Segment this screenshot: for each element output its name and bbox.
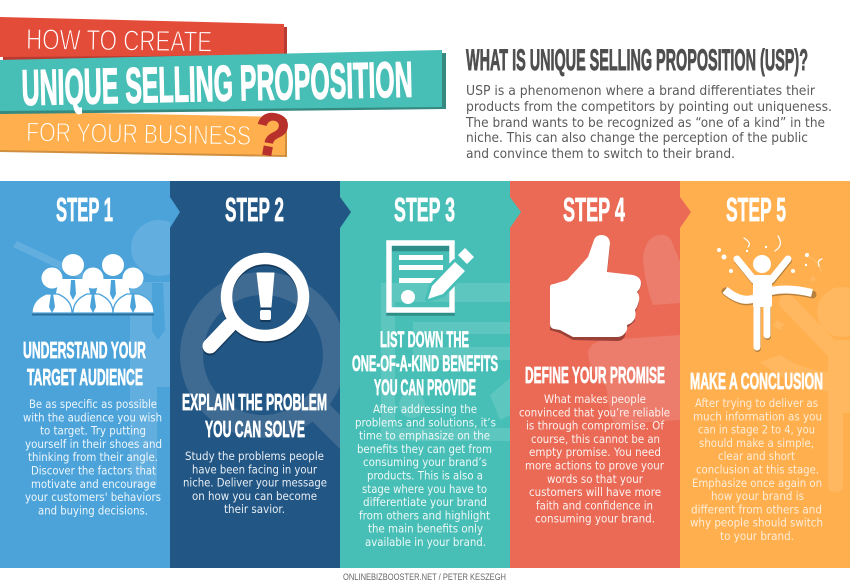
step 4 text: more actions to prove your xyxy=(525,458,664,472)
usp intro xyxy=(465,44,832,162)
step 1 text: yourself in their shoes and xyxy=(25,437,162,451)
step 5 text: much information as you xyxy=(693,409,822,423)
step 5 text xyxy=(690,396,823,543)
step 4 text: course, this cannot be an xyxy=(531,432,660,446)
step 3 text: differentiate your brand xyxy=(363,495,487,509)
icon: runner at finish line xyxy=(717,236,822,348)
step 3 text: from others and highlight xyxy=(359,508,490,522)
step 3 text: After addressing the xyxy=(373,402,477,416)
step 3 subheading: YOU CAN PROVIDE xyxy=(374,375,476,400)
step 2 text: Study the problems people xyxy=(185,449,324,463)
step 5 text: clear and short xyxy=(718,449,795,463)
step 3 subheading: LIST DOWN THE xyxy=(380,327,469,352)
step 1 subheading xyxy=(23,337,146,390)
arrow: step 1 to step 2 xyxy=(170,197,180,228)
step 1 text: motivate and encourage xyxy=(31,477,156,491)
step 3 text: stage where you have to xyxy=(362,482,487,496)
red banner: HOW TO CREATE xyxy=(26,24,212,59)
step 1 text: your customers' behaviors xyxy=(25,490,161,504)
arrow: step 4 to step 5 xyxy=(680,197,691,228)
step 2 subheading xyxy=(182,389,327,442)
orange banner xyxy=(0,111,287,157)
step 1 text xyxy=(23,397,162,517)
step 4 subheading: DEFINE YOUR PROMISE xyxy=(525,362,665,388)
step 2 subheading: YOU CAN SOLVE xyxy=(205,416,305,442)
step 3 text: consuming your brand’s xyxy=(363,455,487,469)
orange banner: FOR YOUR BUSINESS xyxy=(26,117,251,151)
usp paragraph: products from the competitors by pointing out uniqueness. xyxy=(466,100,832,115)
step 5 text: to your brand. xyxy=(720,529,794,543)
step 5 text: why people should switch xyxy=(690,516,823,530)
step 5 text: should make a simple, xyxy=(699,436,814,450)
step 5 text: conclusion at this stage. xyxy=(696,462,819,476)
usp paragraph xyxy=(465,84,832,162)
heading: step 5: STEP 5 xyxy=(726,191,786,228)
red banner xyxy=(0,17,287,60)
icon: checklist with pencil xyxy=(389,243,474,313)
step 4 text: convinced that you’re reliable xyxy=(519,405,670,419)
step 2 text: have been facing in your xyxy=(192,462,317,476)
step 5 text: After trying to deliver as xyxy=(695,396,818,410)
step 3 text: available in your brand. xyxy=(365,535,486,549)
step 2 subheading: EXPLAIN THE PROBLEM xyxy=(182,389,327,415)
step 2 text: on how you can become xyxy=(192,489,317,503)
step 2 text: their savior. xyxy=(224,502,285,516)
background figure: document xyxy=(381,283,510,441)
step 5 text: how your brand is xyxy=(711,489,804,503)
step 4 text: is through compromise. Of xyxy=(526,419,665,433)
step 5 text: can in stage 2 to 4, you xyxy=(698,423,815,437)
step 3 text: the main benefits only xyxy=(368,522,483,536)
heading: step 4: STEP 4 xyxy=(563,191,625,228)
step 3 subheading xyxy=(352,327,498,400)
step 4 text: empty promise. You need xyxy=(529,445,661,459)
step 1 text: and buying decisions. xyxy=(38,503,148,517)
panel: step 4 xyxy=(510,181,680,568)
teal banner xyxy=(0,50,446,116)
step 3 text: products. This is also a xyxy=(367,468,483,482)
background figure: runner xyxy=(760,257,850,492)
step 3 text: benefits they can get from xyxy=(357,442,492,456)
step 4 text: customers will have more xyxy=(529,485,661,499)
teal banner: UNIQUE SELLING PROPOSITION xyxy=(21,51,413,116)
step 2 text: niche. Deliver your message xyxy=(183,476,327,490)
question mark: ? xyxy=(249,99,295,171)
step 4 text: words so that your xyxy=(547,472,643,486)
panel: step 2 xyxy=(170,181,352,568)
heading: step 1: STEP 1 xyxy=(56,191,113,228)
title banner xyxy=(0,17,446,171)
usp paragraph: niche. This can also change the perception of the public xyxy=(466,131,808,146)
step 1 subheading: UNDERSTAND YOUR xyxy=(23,337,146,363)
arrow: step 2 to step 3 xyxy=(340,197,351,228)
step 3 text: problems and solutions, it’s xyxy=(355,415,496,429)
step 1 text: with the audience you wish xyxy=(23,410,162,424)
background figure: magnifier xyxy=(192,284,352,444)
heading: step 3: STEP 3 xyxy=(394,191,455,228)
step 4 text xyxy=(519,392,670,526)
arrow: step 3 to step 4 xyxy=(510,197,521,228)
step 4 text: What makes people xyxy=(544,392,646,406)
icon: thumbs up xyxy=(550,235,641,341)
icon: team of people xyxy=(32,254,154,316)
panel: step 3 xyxy=(340,181,510,568)
step 3 text xyxy=(355,402,496,549)
step 5 text: Emphasize once again on xyxy=(692,476,822,490)
step 3 subheading: ONE-OF-A-KIND BENEFITS xyxy=(352,351,498,376)
icon: magnifying glass xyxy=(210,258,304,348)
step 2 text xyxy=(183,449,327,516)
background figure: person xyxy=(13,220,187,487)
usp paragraph: USP is a phenomenon where a brand differentiates their xyxy=(466,84,815,99)
usp paragraph: The brand wants to be recognized as “one of a kind” in the xyxy=(465,116,825,131)
step 5 text: different from others and xyxy=(691,502,822,516)
step 4 text: faith and confidence in xyxy=(536,498,653,512)
usp paragraph: and convince them to switch to their brand. xyxy=(466,147,735,162)
heading: step 2: STEP 2 xyxy=(225,191,284,228)
step 1 text: Be as specific as possible xyxy=(29,397,157,411)
step 1 text: to target. Try putting xyxy=(40,424,146,438)
step 3 text: time to emphasize on the xyxy=(359,429,490,443)
background figure: thumb xyxy=(588,235,680,424)
panel: step 1 xyxy=(0,181,187,568)
step 4 text: consuming your brand. xyxy=(535,512,655,526)
step 1 text: Discover the factors that xyxy=(31,464,156,478)
step 1 text: thinking from their angle. xyxy=(28,450,158,464)
footer credit: ONLINEBIZBOOSTER.NET / PETER KESZEGH xyxy=(343,572,506,583)
panel: step 5 xyxy=(680,181,850,568)
step 1 subheading: TARGET AUDIENCE xyxy=(27,364,143,390)
